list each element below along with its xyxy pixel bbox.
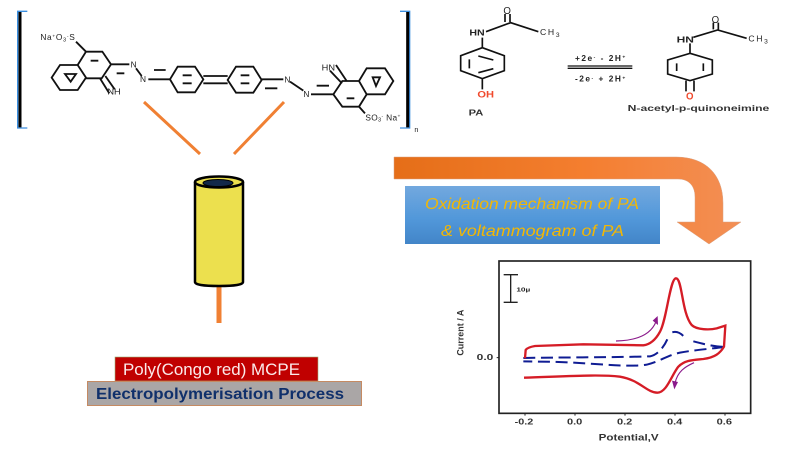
equilibrium arrows: - 2H — [597, 53, 622, 63]
right bracket inner bar — [403, 12, 412, 127]
structure labels: HN — [322, 62, 335, 72]
structure labels: NH — [107, 87, 121, 97]
orange connector lines — [144, 102, 284, 154]
label N-acetyl-p-quinoneimine: N-acetyl-p-quinoneimine — [628, 103, 770, 113]
red label: Poly(Congo red) MCPE: Poly(Congo red) MCPE — [123, 360, 300, 379]
structure labels: n — [414, 125, 418, 134]
structure labels: N — [140, 74, 146, 84]
x axis tick labels: 0.2 — [617, 416, 633, 426]
y axis title: Current / A — [455, 309, 465, 356]
paracetamol molecule: 3 — [556, 32, 561, 39]
bent orange arrow — [394, 157, 741, 244]
electrode body — [195, 182, 243, 286]
structure labels: + — [397, 114, 401, 120]
paracetamol molecule: OH — [477, 90, 494, 100]
blue dashed trace — [523, 332, 726, 366]
equilibrium arrows: + 2H — [595, 74, 622, 84]
paracetamol molecule: CH — [540, 27, 556, 37]
structure labels: N — [284, 75, 290, 85]
equilibrium arrows: - — [592, 75, 595, 81]
right bracket — [400, 11, 410, 128]
y axis zero label: 0.0 — [477, 352, 494, 362]
blue caption box — [405, 186, 660, 244]
structure labels: Na — [40, 32, 52, 42]
structure labels: O — [56, 32, 63, 42]
equilibrium arrows — [568, 53, 632, 84]
left naphthalene rings — [52, 42, 170, 93]
x axis tick labels: 0.0 — [567, 416, 583, 426]
right naphthalene rings — [290, 65, 393, 113]
x axis tick labels: 0.4 — [667, 416, 683, 426]
electrode top opening — [195, 176, 243, 188]
label PA: PA — [469, 108, 484, 118]
structure labels: + — [52, 33, 56, 39]
equilibrium arrows: - — [594, 55, 597, 61]
left bracket inner bar — [15, 12, 24, 127]
cyclic voltammogram chart — [455, 261, 751, 443]
quinoneimine molecule: O — [686, 92, 694, 103]
red CV trace — [524, 278, 725, 393]
left bracket — [18, 11, 27, 128]
structure labels: N — [303, 89, 309, 99]
oxidation reaction scheme — [461, 6, 770, 118]
structure labels: 3 — [63, 37, 67, 43]
equilibrium arrows: -2e — [575, 74, 592, 84]
structure labels: N — [131, 60, 137, 70]
blue caption box: & voltammogram of PA — [441, 223, 624, 240]
paracetamol molecule: O — [503, 6, 511, 17]
central biphenyl rings — [170, 67, 283, 93]
x axis tick labels — [515, 416, 732, 426]
paracetamol molecule — [461, 6, 561, 100]
purple reverse arrow — [672, 363, 694, 389]
equilibrium arrows: + — [622, 55, 627, 61]
structure labels: - — [67, 33, 69, 39]
paracetamol molecule: HN — [469, 28, 485, 38]
quinoneimine molecule: CH — [748, 34, 764, 44]
grey label: Electropolymerisation Process — [88, 382, 362, 406]
quinoneimine molecule: O — [712, 15, 720, 26]
red label: Poly(Congo red) MCPE — [115, 357, 318, 381]
blue caption box: Oxidation mechanism of PA — [425, 196, 639, 213]
scale bar: 10µ — [516, 288, 530, 294]
structure labels: Na — [384, 112, 398, 122]
quinoneimine molecule — [668, 15, 770, 103]
electrode cylinder — [195, 176, 243, 323]
purple forward arrow — [616, 316, 658, 341]
structure labels: S — [69, 32, 75, 42]
quinoneimine molecule: HN — [677, 34, 694, 44]
structure labels: SO — [365, 112, 378, 122]
Congo red polymer structure — [18, 11, 418, 134]
scale bar — [504, 275, 530, 302]
chart frame — [499, 261, 751, 413]
x axis tick labels: -0.2 — [515, 416, 534, 426]
axis ticks — [497, 358, 725, 416]
quinoneimine molecule: 3 — [764, 39, 770, 46]
equilibrium arrows: +2e — [575, 53, 594, 63]
x axis tick labels: 0.6 — [717, 416, 732, 426]
electrode stem — [216, 287, 222, 323]
structure labels: 3 — [378, 118, 382, 124]
x axis title: Potential,V — [599, 433, 659, 443]
electrode bore — [203, 180, 233, 186]
grey label: Electropolymerisation Process: Electropolymerisation Process — [96, 386, 344, 403]
structure labels — [40, 32, 418, 134]
structure labels: - — [382, 114, 384, 120]
equilibrium arrows: + — [622, 75, 627, 81]
